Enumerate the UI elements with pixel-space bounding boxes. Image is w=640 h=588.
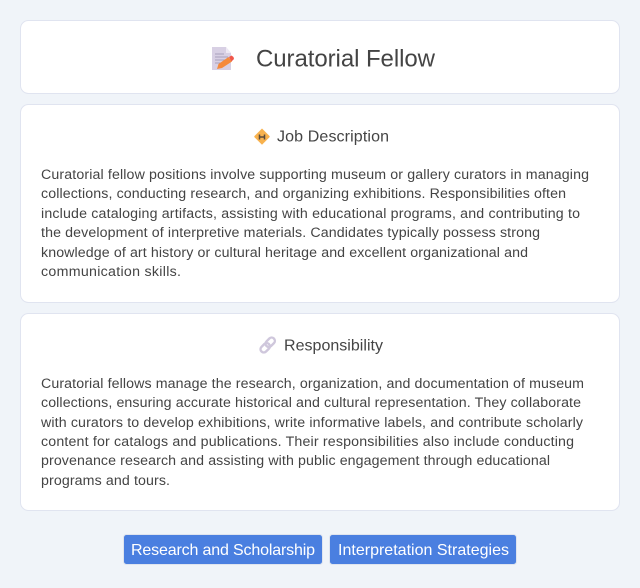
text block: job description: collections, conducting research, and organizing exhibitions. Responsibilities often: [41, 186, 566, 202]
heading: job description: Job Description: [277, 128, 389, 146]
icon: chain link: [259, 336, 276, 354]
panel: title card: [20, 20, 620, 94]
icon: document with pencil: [212, 47, 234, 70]
tag: research and scholarship: Research and Scholarship: [131, 542, 315, 559]
text block: job description: communication skills.: [41, 264, 181, 280]
text block: job description: the development of interpretive materials. Candidates typically possess strong: [41, 225, 540, 241]
text block: responsibility: [40, 376, 584, 489]
text block: job description: [41, 167, 589, 280]
text block: responsibility: collections, ensuring accurate historical and cultural representation. They collaborate: [41, 395, 581, 411]
heading: responsibility: Responsibility: [284, 338, 383, 354]
panel: responsibility: [20, 314, 620, 510]
text block: job description: include cataloging artifacts, assisting with educational programs, and contributing to: [41, 206, 580, 222]
text block: responsibility: Curatorial fellows manage the research, organization, and documentation of museum: [41, 376, 584, 392]
text block: job description: Curatorial fellow positions involve supporting museum or gallery curators in managing: [41, 167, 589, 183]
text block: responsibility: provenance research and assisting with public engagement through educational: [41, 453, 550, 469]
text block: job description: knowledge of art history or cultural heritage and excellent organizational and: [41, 245, 528, 261]
tag: interpretation strategies: Interpretation Strategies: [338, 542, 509, 559]
tag: research and scholarship: [124, 534, 322, 564]
text block: responsibility: programs and tours.: [41, 473, 170, 489]
title: Curatorial Fellow: [256, 46, 436, 72]
tag: interpretation strategies: [330, 534, 516, 564]
panel: job description: [20, 104, 620, 302]
text block: responsibility: with curators to develop exhibitions, write informative labels, and contribute scholarly: [40, 415, 584, 431]
text block: responsibility: content for catalogs and publications. Their responsibilities also include conducting: [41, 434, 574, 450]
icon: road sign diamond: [254, 128, 270, 145]
